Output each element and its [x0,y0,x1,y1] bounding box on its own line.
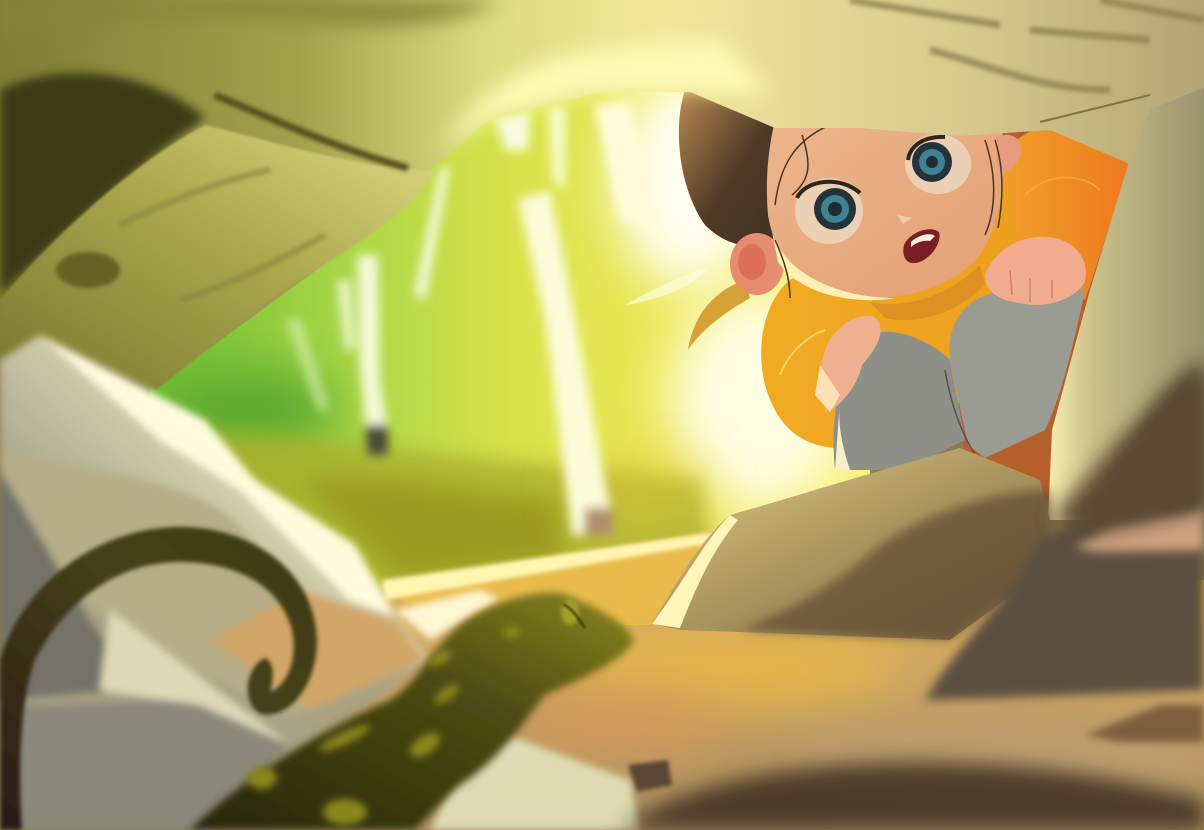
mouth [903,229,940,263]
birch trunks [285,100,660,535]
foreground rock: blurred, right side [925,510,1204,700]
upper hand [985,237,1086,305]
right rock pillar [1048,88,1204,520]
nose [897,215,912,224]
jumper [761,140,1124,448]
gecko body [190,592,634,830]
roof sunlit glow [440,40,770,150]
foreground floor shadow [620,762,1204,830]
floor: sandy cave ground [200,530,1204,830]
gecko spots [247,626,521,825]
boulder: large sandy rock in front of the girl [652,448,1060,640]
ear left [730,233,784,295]
lower left rock slab [0,125,435,390]
hair back [679,90,780,246]
eye right [905,134,971,194]
collar shadow [870,265,985,320]
jumper shoulder [1000,125,1130,300]
right ear [995,135,1021,172]
background: sunlit forest seen through the cave opening [150,70,870,600]
lower hand [815,316,881,412]
girl: peering into the cave [625,90,1140,500]
gecko eye [561,599,579,625]
gecko: blurred silhouette with spotted back [0,527,634,830]
roof rock: top of the cave [0,0,1204,390]
chin rim light [772,232,895,300]
roof dark recess [0,73,205,295]
ponytail [688,280,750,350]
eye left [795,178,863,244]
backing: warm shadow behind the girl [950,130,1140,500]
floor highlight: warm glow at the cave entrance [380,532,715,625]
trousers: grey knees [834,332,965,470]
foreground rocks: pale blurred slabs at left [0,335,640,830]
rock textures upper right [850,0,1204,90]
face [767,115,1004,297]
hair strands [775,125,1002,298]
gecko tail [0,527,317,830]
